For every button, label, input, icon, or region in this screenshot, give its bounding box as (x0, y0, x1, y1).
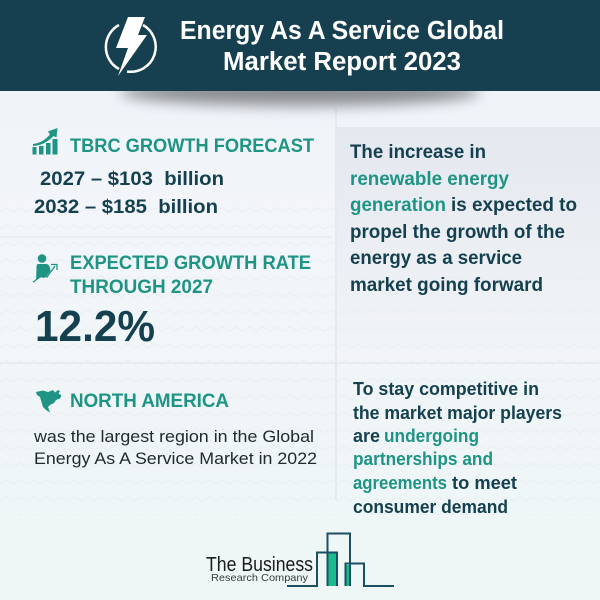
header shadow (120, 78, 480, 106)
text block: competition strategy: undergoing (384, 426, 479, 446)
title (180, 17, 504, 76)
text block: competition strategy: are (353, 426, 380, 446)
icon: north america map (36, 390, 62, 412)
text block: competition strategy: agreements (353, 473, 447, 493)
panel: growth rate (33, 252, 311, 351)
icon: lightning bolt (106, 17, 156, 76)
logo: The Business Research Company: Research Company (211, 572, 309, 584)
heading: expected growth rate: THROUGH 2027 (70, 276, 213, 298)
logo: The Business Research Company: The Business (206, 554, 313, 576)
text block: renewable energy driver: propel the growth of the (350, 222, 565, 243)
value: 12.2%: 12.2% (35, 302, 155, 351)
text block: competition strategy: partnerships and (353, 449, 493, 469)
text block: renewable energy driver: market going forward (350, 275, 543, 296)
panel: right highlight (337, 127, 600, 362)
title: Energy As A Service Global (180, 17, 504, 45)
icon: person with arrow (33, 254, 57, 282)
heading: north america: NORTH AMERICA (70, 390, 229, 412)
forecast values: 2027 – $103 billion (40, 168, 224, 190)
text block: competition strategy: consumer demand (353, 497, 508, 517)
description: Energy As A Service Market in 2022 (34, 449, 317, 468)
text block: competition strategy: To stay competitive in (353, 379, 539, 399)
panel: growth forecast (32, 128, 314, 218)
heading: expected growth rate (70, 252, 311, 298)
heading: expected growth rate: EXPECTED GROWTH RATE (70, 252, 311, 274)
panel: north america (33, 390, 317, 468)
text block: renewable energy driver (350, 142, 577, 296)
heading: TBRC growth forecast: TBRC GROWTH FORECAST (70, 135, 314, 157)
title: Market Report 2023 (223, 48, 461, 76)
header banner (0, 0, 600, 91)
text block: renewable energy driver: energy as a service (350, 248, 522, 269)
text block: renewable energy driver: The increase in (350, 142, 486, 163)
logo: The Business Research Company (206, 534, 394, 586)
text block: competition strategy (353, 379, 562, 517)
text block: renewable energy driver: generation (350, 195, 446, 216)
description (33, 427, 317, 468)
text block: renewable energy driver: is expected to (451, 195, 577, 216)
forecast values (34, 168, 224, 218)
text block: competition strategy: to meet (452, 473, 517, 493)
description: was the largest region in the Global (33, 427, 314, 446)
text block: renewable energy driver: renewable energy (350, 169, 509, 190)
forecast values: 2032 – $185 billion (34, 196, 218, 218)
text block: competition strategy: the market major players (353, 403, 562, 423)
icon: rising bar chart (32, 128, 58, 154)
